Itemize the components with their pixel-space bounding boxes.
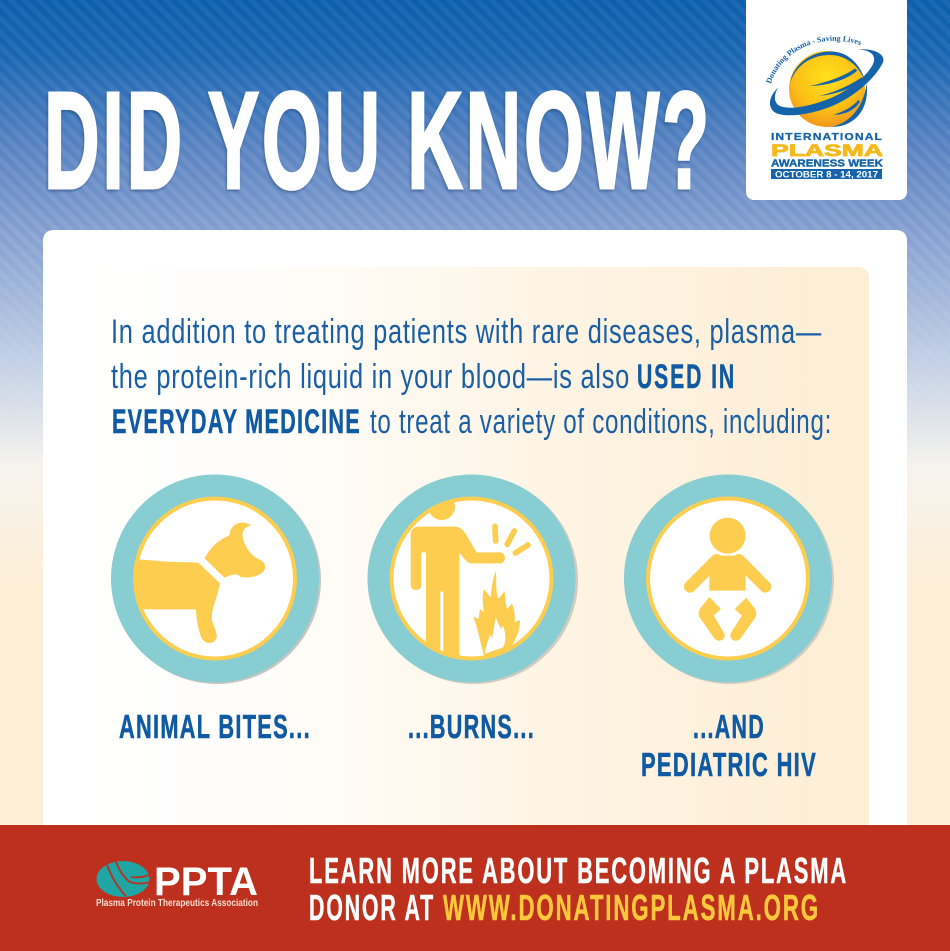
call to action: DONOR AT (309, 887, 435, 928)
intro paragraph: USED IN (637, 358, 736, 396)
intro paragraph: EVERYDAY MEDICINE (112, 403, 361, 441)
logo globe (789, 51, 865, 127)
logo card: International Plasma Awareness Week (746, 0, 907, 200)
label: burns: ...BURNS... (408, 708, 535, 745)
PPTA logo (96, 860, 258, 909)
PPTA letters: PPTA (154, 860, 258, 904)
icon: animal bite dog (111, 474, 321, 684)
intro paragraph: the protein-rich liquid in your blood—is also (111, 358, 630, 396)
icon: baby (624, 474, 834, 684)
logo awareness week: AWARENESS WEEK (771, 158, 883, 170)
main white panel (43, 230, 907, 870)
logo wordmark: INTERNATIONAL (771, 131, 883, 143)
logo curved tagline: Donating Plasma - Saving Lives (766, 35, 861, 84)
striped gradient background (0, 0, 950, 548)
logo PLASMA: PLASMA (771, 141, 883, 160)
icon: burn person and flame (368, 474, 578, 684)
PPTA full name: Plasma Protein Therapeutics Association (96, 898, 258, 909)
logo orbit swooshes (770, 49, 883, 127)
label: pediatric HIV: PEDIATRIC HIV (641, 746, 817, 783)
PPTA emblem (96, 861, 150, 897)
logo date bar: OCTOBER 8 - 14, 2017 (775, 170, 878, 180)
intro paragraph (111, 313, 832, 441)
label: pediatric HIV: ...AND (693, 708, 765, 745)
label: animal bites: ANIMAL BITES... (119, 708, 311, 745)
call to action (309, 850, 848, 928)
inner cream gradient panel (80, 267, 869, 840)
label: pediatric HIV (641, 708, 817, 783)
footer band (0, 825, 950, 951)
